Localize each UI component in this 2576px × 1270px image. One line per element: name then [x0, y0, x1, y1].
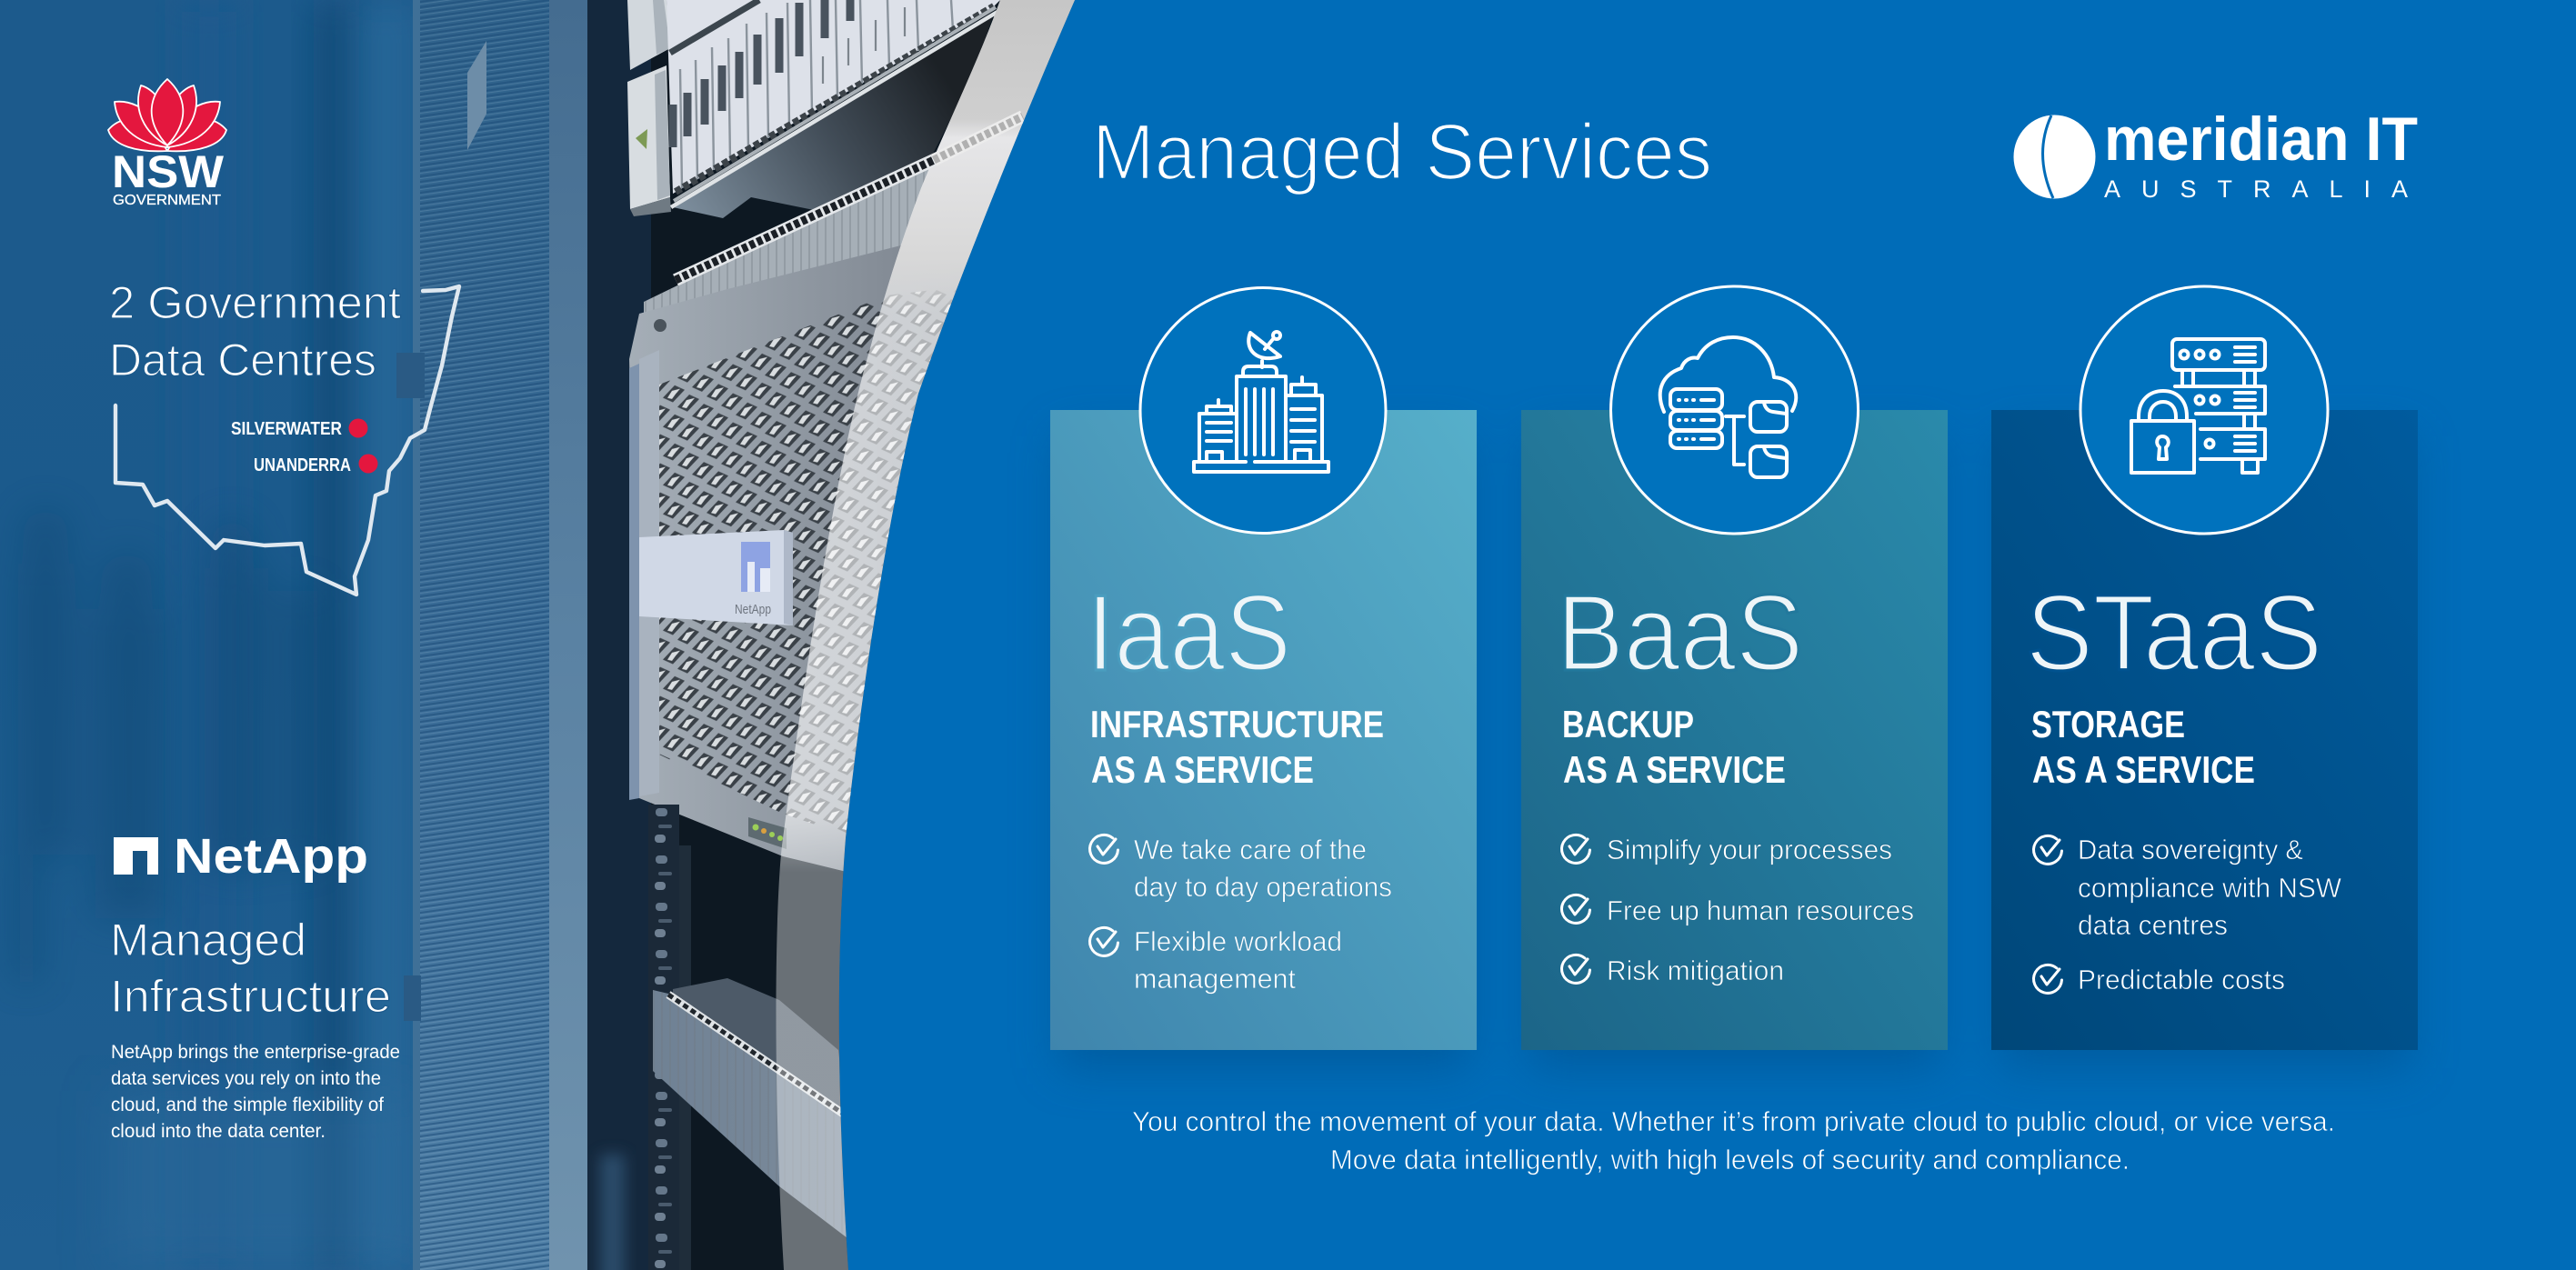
list: IaaS benefits: day to day operations — [1134, 871, 1392, 903]
subheading: Storage as a service — [2031, 703, 2255, 791]
icon: waratah flower — [108, 79, 226, 151]
icon: check — [1090, 927, 1118, 955]
photo: perforated strip — [676, 116, 1023, 280]
list: BaaS benefits: Simplify your processes — [1607, 834, 1892, 865]
subheading: Infrastructure as a service: AS A SERVICE — [1091, 748, 1314, 791]
list: STaaS benefits: compliance with NSW — [2078, 872, 2342, 904]
photo: data centre server rack with blue tint — [0, 0, 1075, 1270]
text: data movement statement: You control the movement of your data. Whether it’s from private cloud to public cloud, or vice versa. — [1132, 1105, 2335, 1137]
heading: IaaS: IaaS — [1087, 573, 1291, 694]
text: data movement statement — [1132, 1105, 2335, 1175]
logo: meridian IT Australia: meridian IT — [2104, 105, 2418, 174]
icon: cloud backup servers — [1611, 286, 1859, 534]
list: BaaS benefits: Risk mitigation — [1607, 955, 1784, 986]
map marker: Unanderra: UNANDERRA — [254, 455, 351, 475]
subheading: Infrastructure as a service — [1090, 703, 1384, 791]
logo: NetApp — [114, 829, 368, 884]
list: IaaS benefits: management — [1134, 963, 1296, 995]
list: IaaS benefits: Flexible workload — [1134, 925, 1342, 957]
heading: 2 Government Data Centres: Data Centres — [109, 335, 376, 385]
heading: STaaS: STaaS — [2026, 573, 2322, 694]
icon: city buildings with satellite dish — [1140, 287, 1386, 533]
heading: Managed Infrastructure: Infrastructure — [110, 971, 391, 1022]
list: BaaS benefits — [1607, 834, 1914, 986]
logo: NSW Government — [108, 79, 226, 208]
subheading: Backup as a service — [1562, 703, 1786, 791]
photo: status lights — [748, 817, 787, 849]
photo: translucent white curved band — [777, 0, 1075, 1270]
list: STaaS benefits: Predictable costs — [2078, 964, 2285, 995]
icon: locked storage server — [2080, 286, 2328, 534]
heading: 2 Government Data Centres: 2 Government — [109, 277, 401, 328]
photo: perforated front panel — [629, 218, 1009, 878]
heading: 2 Government Data Centres — [109, 277, 401, 385]
logo text: GOVERNMENT: GOVERNMENT — [113, 193, 222, 208]
heading: Managed Infrastructure — [110, 915, 391, 1022]
photo: blurred people silhouettes — [24, 532, 300, 912]
text: NetApp description: cloud into the data center. — [111, 1120, 326, 1142]
photo: door frame and dark post — [549, 0, 651, 1270]
icon: check — [1562, 835, 1589, 863]
logo: meridian IT Australia: AUSTRALIA — [2104, 175, 2408, 203]
photo: netapp badge — [639, 530, 793, 625]
photo: equipment interior — [651, 0, 1088, 1270]
card shadows — [1059, 436, 2410, 1068]
subheading: Backup as a service: BACKUP — [1562, 703, 1694, 745]
heading: BaaS: BaaS — [1557, 573, 1803, 694]
subheading: Infrastructure as a service: INFRASTRUCTURE — [1090, 703, 1384, 745]
icon: check — [2034, 835, 2062, 864]
photo: hard drive caddies — [667, 0, 1000, 207]
photo: dark shelf under drives — [673, 13, 994, 218]
icon: check — [2034, 965, 2062, 993]
subheading: Storage as a service: STORAGE — [2031, 703, 2185, 745]
map: NSW outline — [115, 286, 459, 595]
panel: BaaS — [1521, 410, 1948, 1050]
photo: netapp badge: NetApp — [735, 602, 771, 617]
panel: IaaS — [1050, 410, 1477, 1050]
logo: NetApp: NetApp — [174, 829, 368, 884]
panel: STaaS — [1991, 410, 2418, 1050]
icon: check — [1562, 895, 1589, 923]
title: Managed Services: Managed Services — [1092, 108, 1712, 196]
photo: blue tinted aisle — [0, 0, 413, 1270]
map marker: Silverwater: SILVERWATER — [231, 419, 342, 439]
list: BaaS benefits: Free up human resources — [1607, 895, 1914, 926]
photo: light upper band — [882, 0, 1075, 304]
icon: check — [1090, 835, 1118, 863]
icon: check — [1562, 955, 1589, 983]
list: STaaS benefits — [2078, 834, 2342, 995]
photo: mesh door — [396, 0, 551, 1270]
subheading: Backup as a service: AS A SERVICE — [1563, 748, 1786, 791]
photo: ribbed faceplate — [644, 169, 1000, 313]
text: NetApp description — [111, 1041, 400, 1142]
photo: drive bay bezels — [627, 0, 671, 216]
subheading: Storage as a service: AS A SERVICE — [2032, 748, 2255, 791]
list: IaaS benefits — [1134, 834, 1392, 995]
list: STaaS benefits: Data sovereignty & — [2078, 834, 2303, 865]
list: IaaS benefits: We take care of the — [1134, 834, 1367, 865]
photo: vertical rack rail — [648, 805, 691, 1270]
logo: meridian IT Australia — [2013, 105, 2418, 203]
photo: lower slab shelf — [653, 978, 851, 1241]
heading: Managed Infrastructure: Managed — [110, 915, 306, 965]
text: NetApp description: cloud, and the simple flexibility of — [111, 1094, 384, 1115]
text: data movement statement: Move data intelligently, with high levels of security and compliance. — [1330, 1144, 2130, 1175]
text: NetApp description: data services you rely on into the — [111, 1067, 381, 1089]
text: NetApp description: NetApp brings the enterprise-grade — [111, 1041, 400, 1063]
logo text: NSW: NSW — [112, 146, 225, 197]
list: STaaS benefits: data centres — [2078, 909, 2228, 941]
